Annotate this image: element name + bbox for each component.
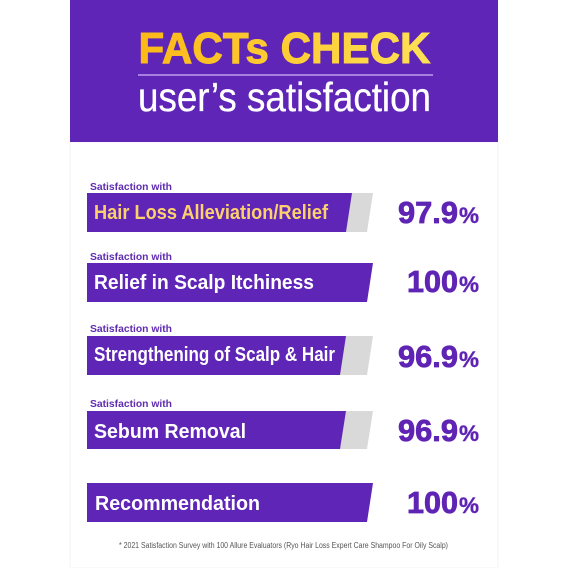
row: hair loss alleviation: 97.9	[398, 195, 458, 230]
footnote: * 2021 Satisfaction Survey with 100 Allure Evaluators (Ryo Hair Loss Expert Care Shampoo For Oily Scalp)	[119, 541, 448, 550]
title: FACTs CHECK	[138, 24, 431, 73]
row: hair loss alleviation: %	[459, 203, 479, 228]
row: strengthening	[87, 323, 479, 375]
row: strengthening: 96.9	[398, 339, 458, 374]
row: sebum removal: Satisfaction with	[90, 398, 172, 410]
header panel	[70, 0, 498, 142]
row: scalp itchiness	[87, 251, 479, 302]
row: strengthening: Satisfaction with	[90, 323, 172, 335]
row: recommendation	[87, 483, 479, 522]
row: sebum removal	[87, 398, 479, 449]
row: hair loss alleviation	[87, 181, 479, 232]
row: recommendation: 100	[407, 485, 458, 520]
row: sebum removal: 96.9	[398, 413, 458, 448]
row: sebum removal: Sebum Removal	[94, 421, 246, 443]
row: recommendation: Recommendation	[95, 493, 260, 515]
row: strengthening: Strengthening of Scalp & Hair	[94, 344, 335, 366]
row: hair loss alleviation: Satisfaction with	[90, 181, 172, 193]
row: scalp itchiness: %	[459, 272, 479, 297]
subtitle: user’s satisfaction	[138, 74, 431, 120]
row: scalp itchiness: Satisfaction with	[90, 251, 172, 263]
row: sebum removal: %	[459, 421, 479, 446]
row: recommendation: %	[459, 493, 479, 518]
row: scalp itchiness: 100	[407, 264, 458, 299]
row: scalp itchiness: Relief in Scalp Itchiness	[94, 272, 314, 294]
row: strengthening: %	[459, 347, 479, 372]
row: hair loss alleviation: Hair Loss Alleviation/Relief	[94, 202, 328, 224]
